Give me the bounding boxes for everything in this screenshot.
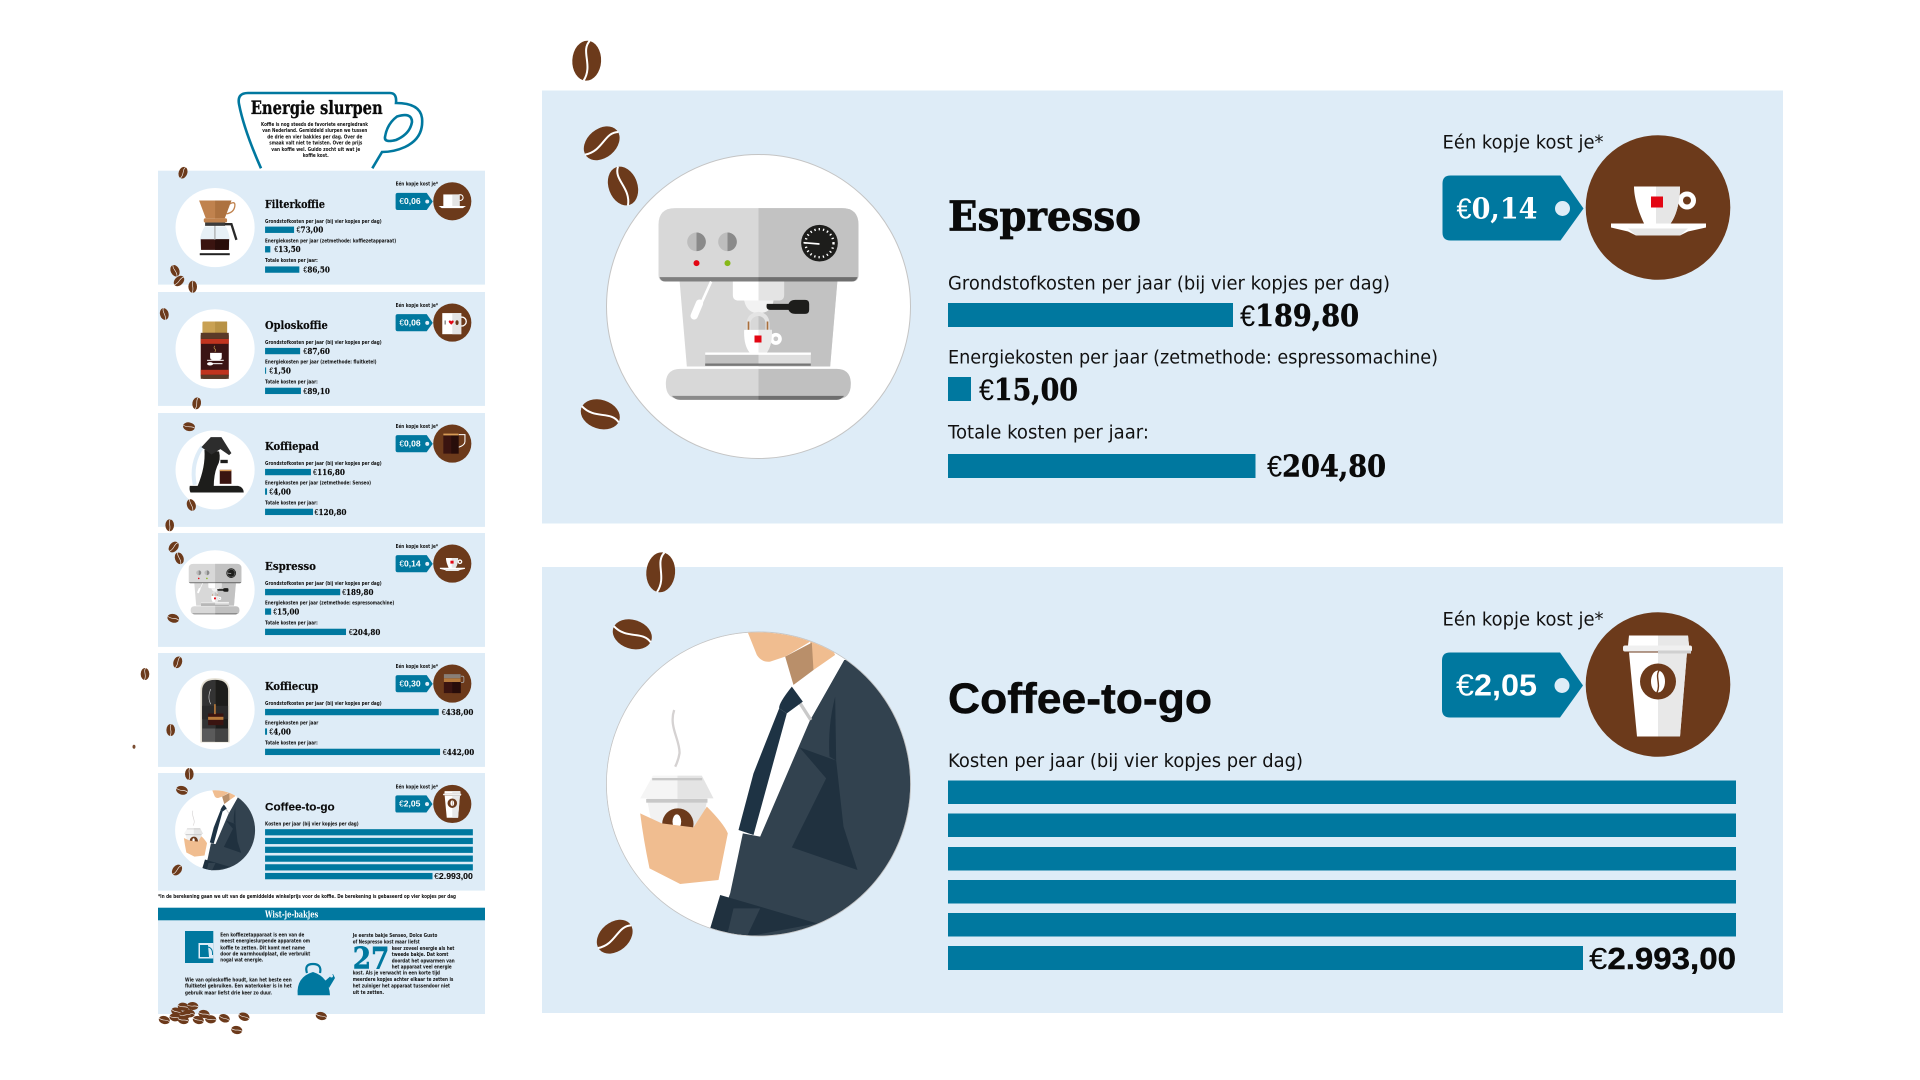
- mini panel: Espresso: Energiekosten per jaar (zetmethode: espressomachine): [265, 601, 394, 607]
- intro text: smaak valt niet te twisten. Over de prijs: [269, 141, 362, 147]
- mini panel: Oploskoffie: €89,10: [303, 387, 330, 396]
- text: eerste bakje: kost. Als je verwacht in een korte tijd: [353, 970, 440, 976]
- heading: Oploskoffie: [265, 319, 328, 332]
- mini panel: Oploskoffie: [158, 292, 485, 406]
- heading: Espresso: [265, 560, 316, 573]
- panel: Espresso (large): [542, 90, 1783, 524]
- price tag: [396, 555, 433, 572]
- mini panel: Espresso: €15,00: [273, 607, 300, 616]
- text: eerste bakje: doordat het opwarmen van: [392, 959, 455, 965]
- mini panel: Coffee-to-go: Eén kopje kost je*: [396, 783, 438, 790]
- panel: Coffee-to-go (large): [542, 567, 1783, 1013]
- value: kosten: €2.993,00: [1589, 941, 1736, 976]
- mini panel: Koffiecup: €4,00: [269, 727, 291, 736]
- icon: kettle: [298, 964, 335, 995]
- text: eerste bakje: het zuiniger het apparaat tussendoor niet: [353, 984, 450, 990]
- price tag: €2,05: [1456, 668, 1537, 702]
- icon: glass cup: [433, 665, 471, 703]
- header: cup outline with title: [239, 93, 422, 168]
- text: eerste bakje: [352, 933, 455, 996]
- text: eerste bakje: 27: [353, 942, 389, 977]
- value: energiekosten: €15,00: [979, 373, 1078, 408]
- mini panel: Filterkoffie: Energiekosten per jaar (zetmethode: koffiezetapparaat): [265, 238, 396, 244]
- mini panel: Filterkoffie: Totale kosten per jaar:: [265, 258, 318, 264]
- heading: Espresso: Espresso: [948, 192, 1141, 240]
- mini panel: Coffee-to-go: [158, 773, 485, 891]
- label: kosten per jaar: Kosten per jaar (bij vier kopjes per dag): [948, 750, 1303, 772]
- mini panel: Koffiecup: [158, 653, 485, 767]
- price tag: €0,14: [1456, 192, 1538, 226]
- panel: Wist-je-bakjes: [158, 908, 485, 1014]
- mini panel: Coffee-to-go: Kosten per jaar (bij vier kopjes per dag): [265, 821, 359, 827]
- mini panel: Espresso: Grondstofkosten per jaar (bij vier kopjes per dag): [265, 581, 382, 587]
- price tag: €0,06: [399, 197, 421, 206]
- mini panel: Koffiepad: Totale kosten per jaar:: [265, 501, 318, 507]
- footnote: *In de berekening gaan we uit van de gemiddelde winkelprijs voor de koffie. De berekening is gebaseerd op vier kopjes per dag: [158, 894, 456, 900]
- mini panel: Filterkoffie: Grondstofkosten per jaar (bij vier kopjes per dag): [265, 219, 382, 225]
- icon: to-go cup: [1586, 612, 1730, 757]
- label: grondstofkosten: Grondstofkosten per jaar (bij vier kopjes per dag): [948, 272, 1390, 294]
- label: een kopje: Eén kopje kost je*: [1442, 132, 1604, 154]
- mini panel: Filterkoffie: [158, 171, 485, 285]
- mini panel: Koffiecup: €442,00: [443, 748, 475, 757]
- mini panel: Filterkoffie: €86,50: [303, 265, 330, 274]
- mini panel: Espresso: Eén kopje kost je*: [396, 543, 438, 550]
- mini panel: Filterkoffie: Eén kopje kost je*: [396, 181, 438, 188]
- title: Energie slurpen: [251, 98, 383, 119]
- mini panel: Oploskoffie: Totale kosten per jaar:: [265, 380, 318, 386]
- illustration: pad machine: [176, 430, 255, 509]
- intro text: de drie en vier bakkies per dag. Over de: [267, 134, 363, 140]
- text: koffiezetapparaat: Een koffiezetapparaat is een van de: [220, 933, 305, 939]
- bar: energiekosten: [948, 377, 971, 401]
- illustration: espresso machine: [176, 550, 255, 629]
- text: koffiezetapparaat: nogal wat energie.: [220, 958, 263, 964]
- bar: grondstofkosten: [948, 303, 1233, 327]
- heading: Wist-je-bakjes: [264, 910, 318, 920]
- mini panel: Koffiepad: €120,80: [314, 508, 347, 517]
- price tag: [396, 675, 433, 692]
- heading: Coffee-to-go: Coffee-to-go: [948, 675, 1212, 723]
- mini panel: Koffiepad: Grondstofkosten per jaar (bij vier kopjes per dag): [265, 461, 382, 467]
- beans around the large panels: [571, 40, 677, 961]
- illustration: businessman with cup: [604, 630, 923, 957]
- heading: Coffee-to-go: [265, 802, 335, 814]
- mini panel: Koffiecup: Energiekosten per jaar: [265, 721, 319, 727]
- mini panel: Oploskoffie: €87,60: [303, 347, 330, 356]
- mini panel: Koffiepad: [158, 413, 485, 527]
- text: eerste bakje: het apparaat veel energie: [392, 965, 452, 971]
- mini panel: Filterkoffie: €73,00: [296, 226, 324, 235]
- icon: espresso cup: [433, 545, 471, 583]
- bar: totale kosten: [948, 454, 1256, 478]
- mini panel: Espresso: €189,80: [342, 588, 374, 597]
- price tag: €2,05: [399, 800, 421, 809]
- text: koffiezetapparaat: koffie te zetten. Dit komt met name: [220, 945, 305, 951]
- small beans around the mini panels: [133, 166, 202, 877]
- price tag: [396, 314, 433, 331]
- pile of beans: [158, 1001, 328, 1035]
- icon: to-go cup: [433, 785, 471, 823]
- text: eerste bakje: tweede bakje. Dat komt: [392, 952, 449, 958]
- price tag: [396, 193, 433, 210]
- text: eerste bakje: uit te zetten.: [353, 990, 384, 996]
- mini panel: Oploskoffie: Eén kopje kost je*: [396, 302, 438, 309]
- price tag: €0,08: [399, 439, 421, 448]
- icon: coffee maker: [185, 931, 213, 963]
- mini panel: Espresso: [158, 533, 485, 647]
- text: oploskoffie: gebruik maar liefst drie keer zo duur.: [185, 990, 272, 996]
- text: koffiezetapparaat: door de warmhoudplaat, die verbruikt: [220, 952, 311, 958]
- price tag: [396, 435, 433, 452]
- value: totale kosten: €204,80: [1267, 450, 1386, 484]
- text: oploskoffie: fluitketel gebruiken. Een waterkoker is in het: [185, 984, 292, 990]
- mini panel: Koffiecup: Totale kosten per jaar:: [265, 741, 318, 747]
- mini panel: Coffee-to-go: €2.993,00: [434, 872, 473, 881]
- illustration: businessman: [174, 790, 259, 876]
- bar chart: six rows: [948, 780, 1736, 970]
- mini panel: Oploskoffie: Grondstofkosten per jaar (bij vier kopjes per dag): [265, 340, 382, 346]
- price tag: [395, 795, 433, 813]
- icon: espresso cup: [1586, 135, 1730, 280]
- heading: Filterkoffie: [265, 198, 325, 211]
- price tag: €0,14: [399, 559, 421, 568]
- price tag: €0,30: [399, 679, 421, 688]
- illustration: capsule machine: [176, 670, 255, 749]
- value: grondstofkosten: €189,80: [1240, 299, 1359, 334]
- heading: Koffiecup: [265, 680, 319, 693]
- intro text: van Nederland. Gemiddeld slurpen we tussen: [262, 128, 368, 134]
- intro text: [261, 122, 368, 159]
- intro text: Koffie is nog steeds de favoriete energiedrank: [261, 122, 368, 128]
- label: totale kosten: Totale kosten per jaar:: [947, 422, 1149, 444]
- bars: [265, 829, 473, 879]
- mini panel: Koffiecup: €438,00: [442, 708, 474, 717]
- text: eerste bakje: of Nespresso kost maar liefst: [353, 939, 420, 945]
- mini panel: Espresso: €204,80: [349, 628, 381, 637]
- text: oploskoffie: Wie van oploskoffie houdt, kan het beste een: [185, 978, 292, 984]
- label: energiekosten: Energiekosten per jaar (zetmethode: espressomachine): [948, 346, 1438, 368]
- label: een kopje: Eén kopje kost je*: [1442, 608, 1604, 630]
- mini panel: Koffiepad: €116,80: [313, 468, 345, 477]
- icon: mug: [433, 304, 471, 342]
- illustration: jar: [176, 309, 255, 388]
- illustration: espresso machine: [606, 154, 910, 458]
- text: eerste bakje: meerdere kopjes achter elkaar te zetten is: [353, 977, 453, 983]
- text: eerste bakje: keer zoveel energie als het: [392, 946, 455, 952]
- mini panel: Koffiepad: Eén kopje kost je*: [396, 423, 438, 430]
- mini panel: Oploskoffie: €1,50: [269, 366, 291, 375]
- mini panel: Koffiepad: Energiekosten per jaar (zetmethode: Senseo): [265, 481, 371, 487]
- price tag: [1442, 652, 1583, 718]
- mini panel: Oploskoffie: Energiekosten per jaar (zetmethode: fluitketel): [265, 360, 377, 366]
- text: koffiezetapparaat: meest energieslurpende apparaten om: [220, 939, 310, 945]
- heading: Koffiepad: [265, 440, 319, 453]
- text: eerste bakje: Je eerste bakje Senseo, Dolce Gusto: [352, 933, 438, 939]
- intro text: koffie kost.: [303, 153, 329, 159]
- intro text: van koffie wel. Guido zocht uit wat je: [271, 147, 361, 153]
- mini panel: Koffiecup: Eén kopje kost je*: [396, 663, 438, 670]
- icon: glass: [433, 425, 471, 463]
- mini panel: Koffiepad: €4,00: [269, 487, 291, 496]
- text: oploskoffie: [185, 978, 292, 996]
- price tag: [1442, 176, 1584, 240]
- icon: cup: [433, 182, 471, 220]
- illustration: filter coffee: [176, 188, 255, 267]
- mini panel: Filterkoffie: €13,50: [274, 245, 301, 254]
- text: koffiezetapparaat: [220, 933, 311, 964]
- mini panel: Koffiecup: Grondstofkosten per jaar (bij vier kopjes per dag): [265, 701, 382, 707]
- mini panel: Espresso: Totale kosten per jaar:: [265, 621, 318, 627]
- price tag: €0,06: [399, 318, 421, 327]
